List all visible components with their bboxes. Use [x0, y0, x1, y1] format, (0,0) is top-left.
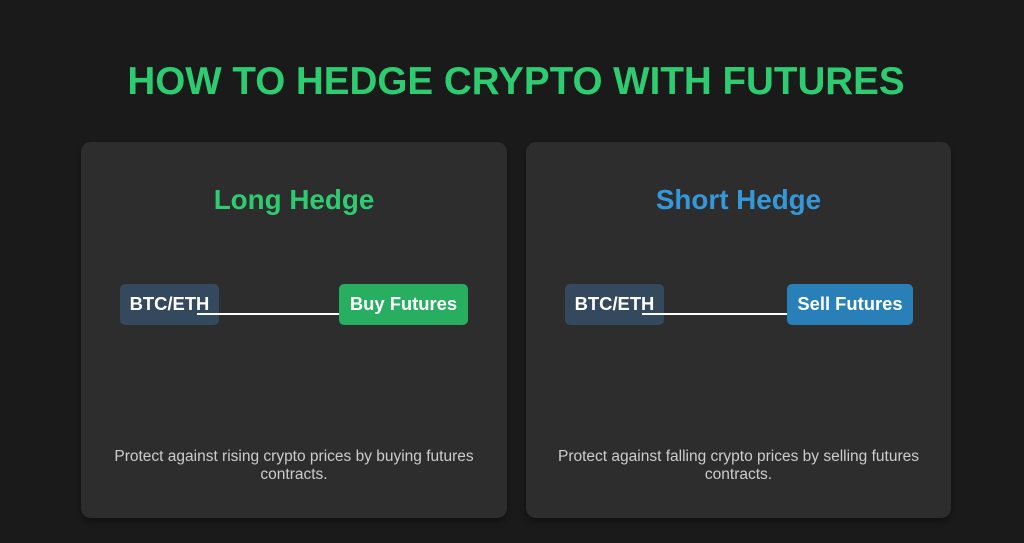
- arrow line: BTC/ETH to sell futures: [642, 313, 787, 315]
- title: HOW TO HEDGE CRYPTO WITH FUTURES: [127, 60, 905, 103]
- heading: short hedge: Short Hedge: [656, 184, 821, 215]
- box: BTC/ETH: BTC/ETH: [130, 293, 209, 314]
- panel: short hedge: [526, 142, 951, 518]
- description: short hedge: Protect against falling crypto prices by selling futures contracts.: [558, 448, 919, 483]
- box: sell futures: Sell Futures: [797, 293, 903, 314]
- description: long hedge: Protect against rising crypto prices by buying futures contracts.: [114, 448, 474, 483]
- box: buy futures: [339, 284, 468, 325]
- box: BTC/ETH: [565, 284, 664, 325]
- box: BTC/ETH: [120, 284, 219, 325]
- box: sell futures: [787, 284, 913, 325]
- panel: long hedge: [81, 142, 507, 518]
- heading: long hedge: Long Hedge: [214, 184, 374, 215]
- box: buy futures: Buy Futures: [350, 293, 457, 314]
- box: BTC/ETH: BTC/ETH: [575, 293, 654, 314]
- arrow line: BTC/ETH to buy futures: [197, 313, 339, 315]
